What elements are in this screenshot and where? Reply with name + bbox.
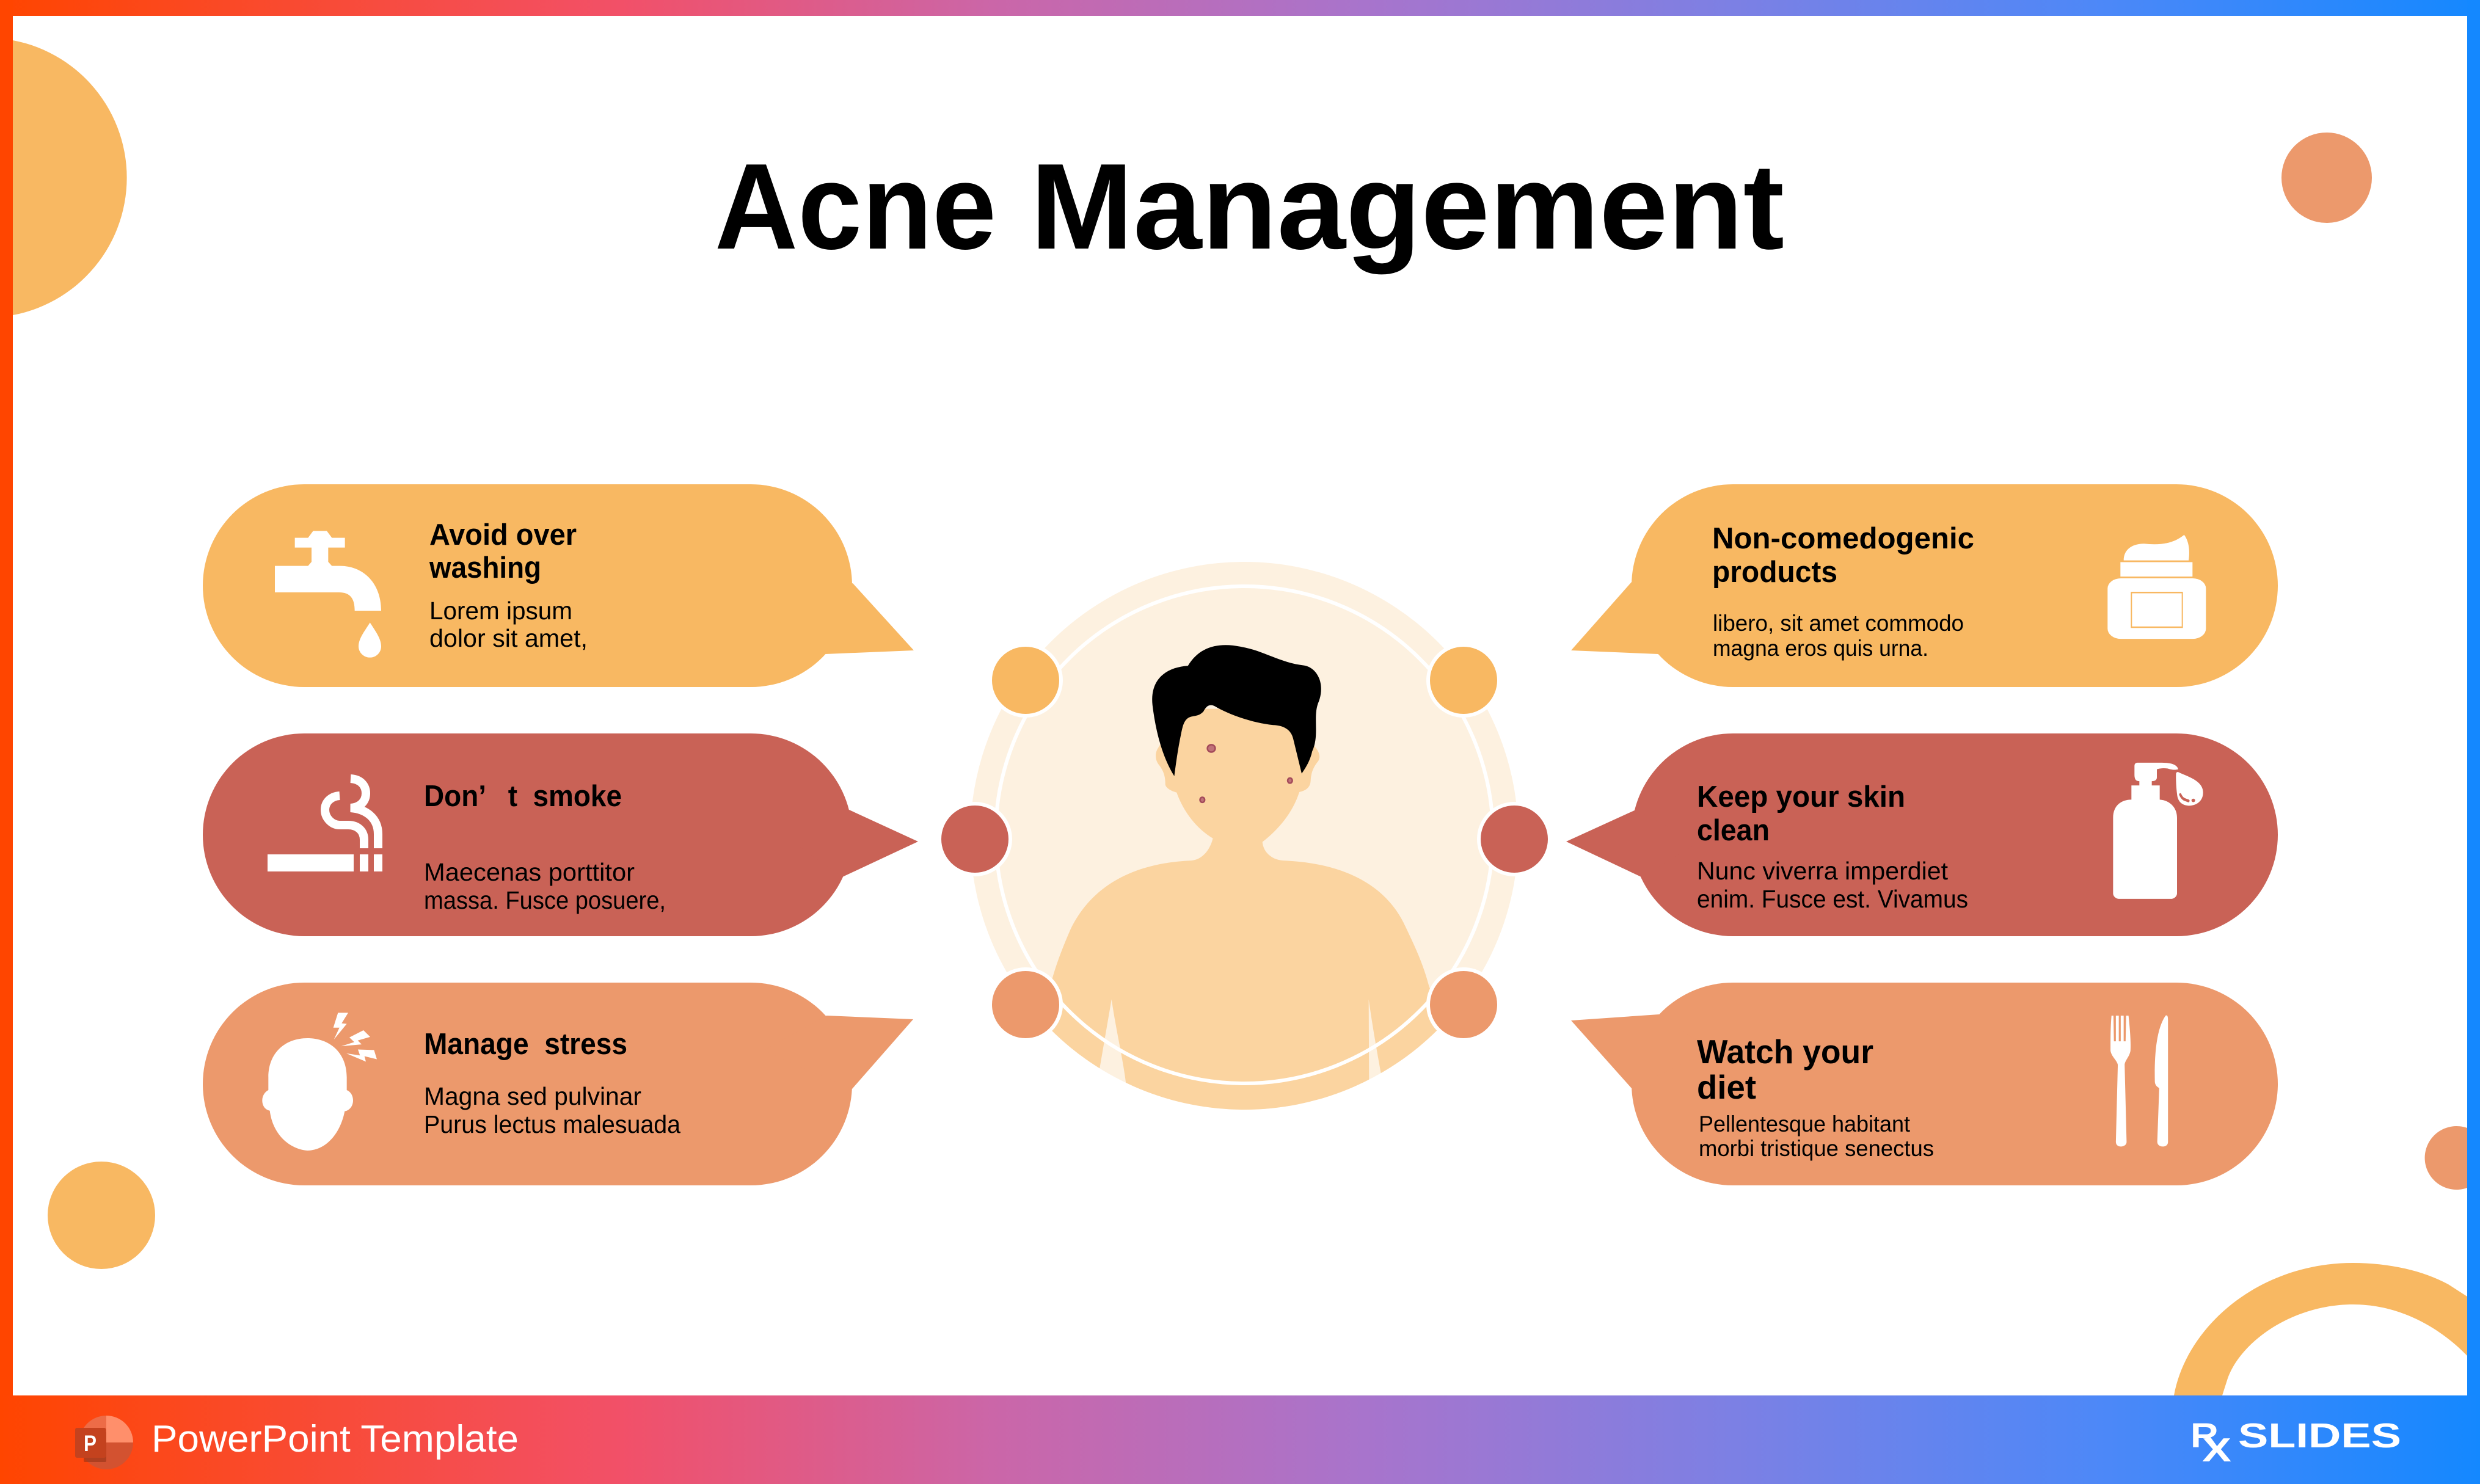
panel: non-comedogenic products [1571, 484, 2278, 687]
body text: Pellentesque habitant [1699, 1111, 1911, 1137]
node: middle left [941, 806, 1008, 873]
body text [429, 597, 588, 652]
heading: diet [1697, 1068, 1756, 1106]
body text: magna eros quis urna. [1713, 636, 1928, 661]
icon: cream jar [2107, 535, 2206, 639]
body text: libero, sit amet commodo [1713, 611, 1964, 636]
frame: top gradient bar [0, 0, 2480, 16]
node: top left [992, 647, 1059, 714]
body text [1713, 611, 1964, 661]
body text [424, 1082, 680, 1138]
body text [424, 858, 666, 914]
panel: watch your diet [1571, 983, 2278, 1185]
body text [1697, 857, 1968, 913]
RxSlides logo: R [2190, 1416, 2219, 1455]
icon: faucet with water drop [275, 531, 381, 658]
body text: morbi tristique senectus [1699, 1136, 1934, 1161]
footer band [0, 1395, 2480, 1484]
heading: Avoid over [429, 518, 577, 551]
decorative circle: bottom left [48, 1162, 155, 1269]
RxSlides logo [2190, 1416, 2401, 1469]
node: middle right [1481, 806, 1548, 873]
node: bottom left [992, 971, 1059, 1038]
icon: head with stress bolts [262, 1013, 377, 1151]
background disc [970, 562, 1519, 1110]
icon: PowerPoint logo: P [84, 1431, 97, 1456]
heading: washing [429, 551, 541, 584]
heading: products [1712, 556, 1837, 589]
body text: Lorem ipsum [429, 597, 572, 625]
panel: manage stress [203, 983, 913, 1185]
heading: clean [1697, 814, 1770, 847]
RxSlides logo: SLIDES [2238, 1416, 2401, 1455]
speech bubble [1566, 733, 2278, 936]
frame: left bar [0, 0, 13, 1484]
panel: don't smoke [203, 733, 918, 936]
body text: Purus lectus malesuada [424, 1110, 680, 1138]
acne spots [1200, 744, 1293, 802]
frame: right bar [2467, 0, 2480, 1484]
heading [1712, 522, 1974, 589]
title [715, 139, 1784, 275]
body text: massa. Fusce posuere, [424, 886, 666, 914]
RxSlides logo: X [2202, 1431, 2231, 1469]
figure: head and ears [1156, 709, 1319, 842]
heading [1697, 780, 1905, 847]
node: top right [1430, 647, 1497, 714]
speech bubble [1571, 484, 2278, 687]
heading: Non-comedogenic [1712, 522, 1974, 555]
icon: cigarette with smoke [268, 779, 382, 871]
body text: enim. Fusce est. Vivamus [1697, 885, 1968, 913]
speech bubble [1571, 983, 2278, 1185]
body text: Nunc viverra imperdiet [1697, 857, 1949, 885]
central illustration: person with acne [941, 562, 1548, 1142]
body text: Magna sed pulvinar [424, 1082, 641, 1110]
icon: fork and knife [2110, 1016, 2168, 1146]
title: Management [1030, 139, 1784, 275]
heading: Keep your skin [1697, 780, 1905, 813]
decorative circle: right edge [2425, 1126, 2467, 1190]
body text: Maecenas porttitor [424, 858, 635, 886]
heading: Watch your [1697, 1033, 1873, 1071]
title: Acne [715, 139, 996, 275]
heading: Manage stress [424, 1028, 627, 1061]
heading: Don’ t smoke [424, 780, 622, 813]
heading [429, 518, 577, 584]
figure: shoulders and torso [1052, 838, 1437, 1110]
node: bottom right [1430, 971, 1497, 1038]
figure: hair [1152, 645, 1321, 776]
body text: dolor sit amet, [429, 624, 588, 652]
white ring [996, 586, 1493, 1083]
footer label: PowerPoint Template [151, 1418, 519, 1460]
body text [1699, 1111, 1934, 1161]
panel: keep your skin clean [1566, 733, 2278, 936]
speech bubble [203, 983, 913, 1185]
speech bubble [203, 484, 914, 687]
panel: avoid over washing [203, 484, 914, 687]
decorative circle: top left [0, 38, 127, 317]
icon: PowerPoint logo [75, 1416, 133, 1469]
heading [1697, 1033, 1873, 1106]
speech bubble [203, 733, 918, 936]
icon: pump bottle with drop [2113, 763, 2203, 899]
decorative circle: top right [2281, 133, 2372, 223]
decorative ring: bottom right [2174, 1263, 2467, 1395]
